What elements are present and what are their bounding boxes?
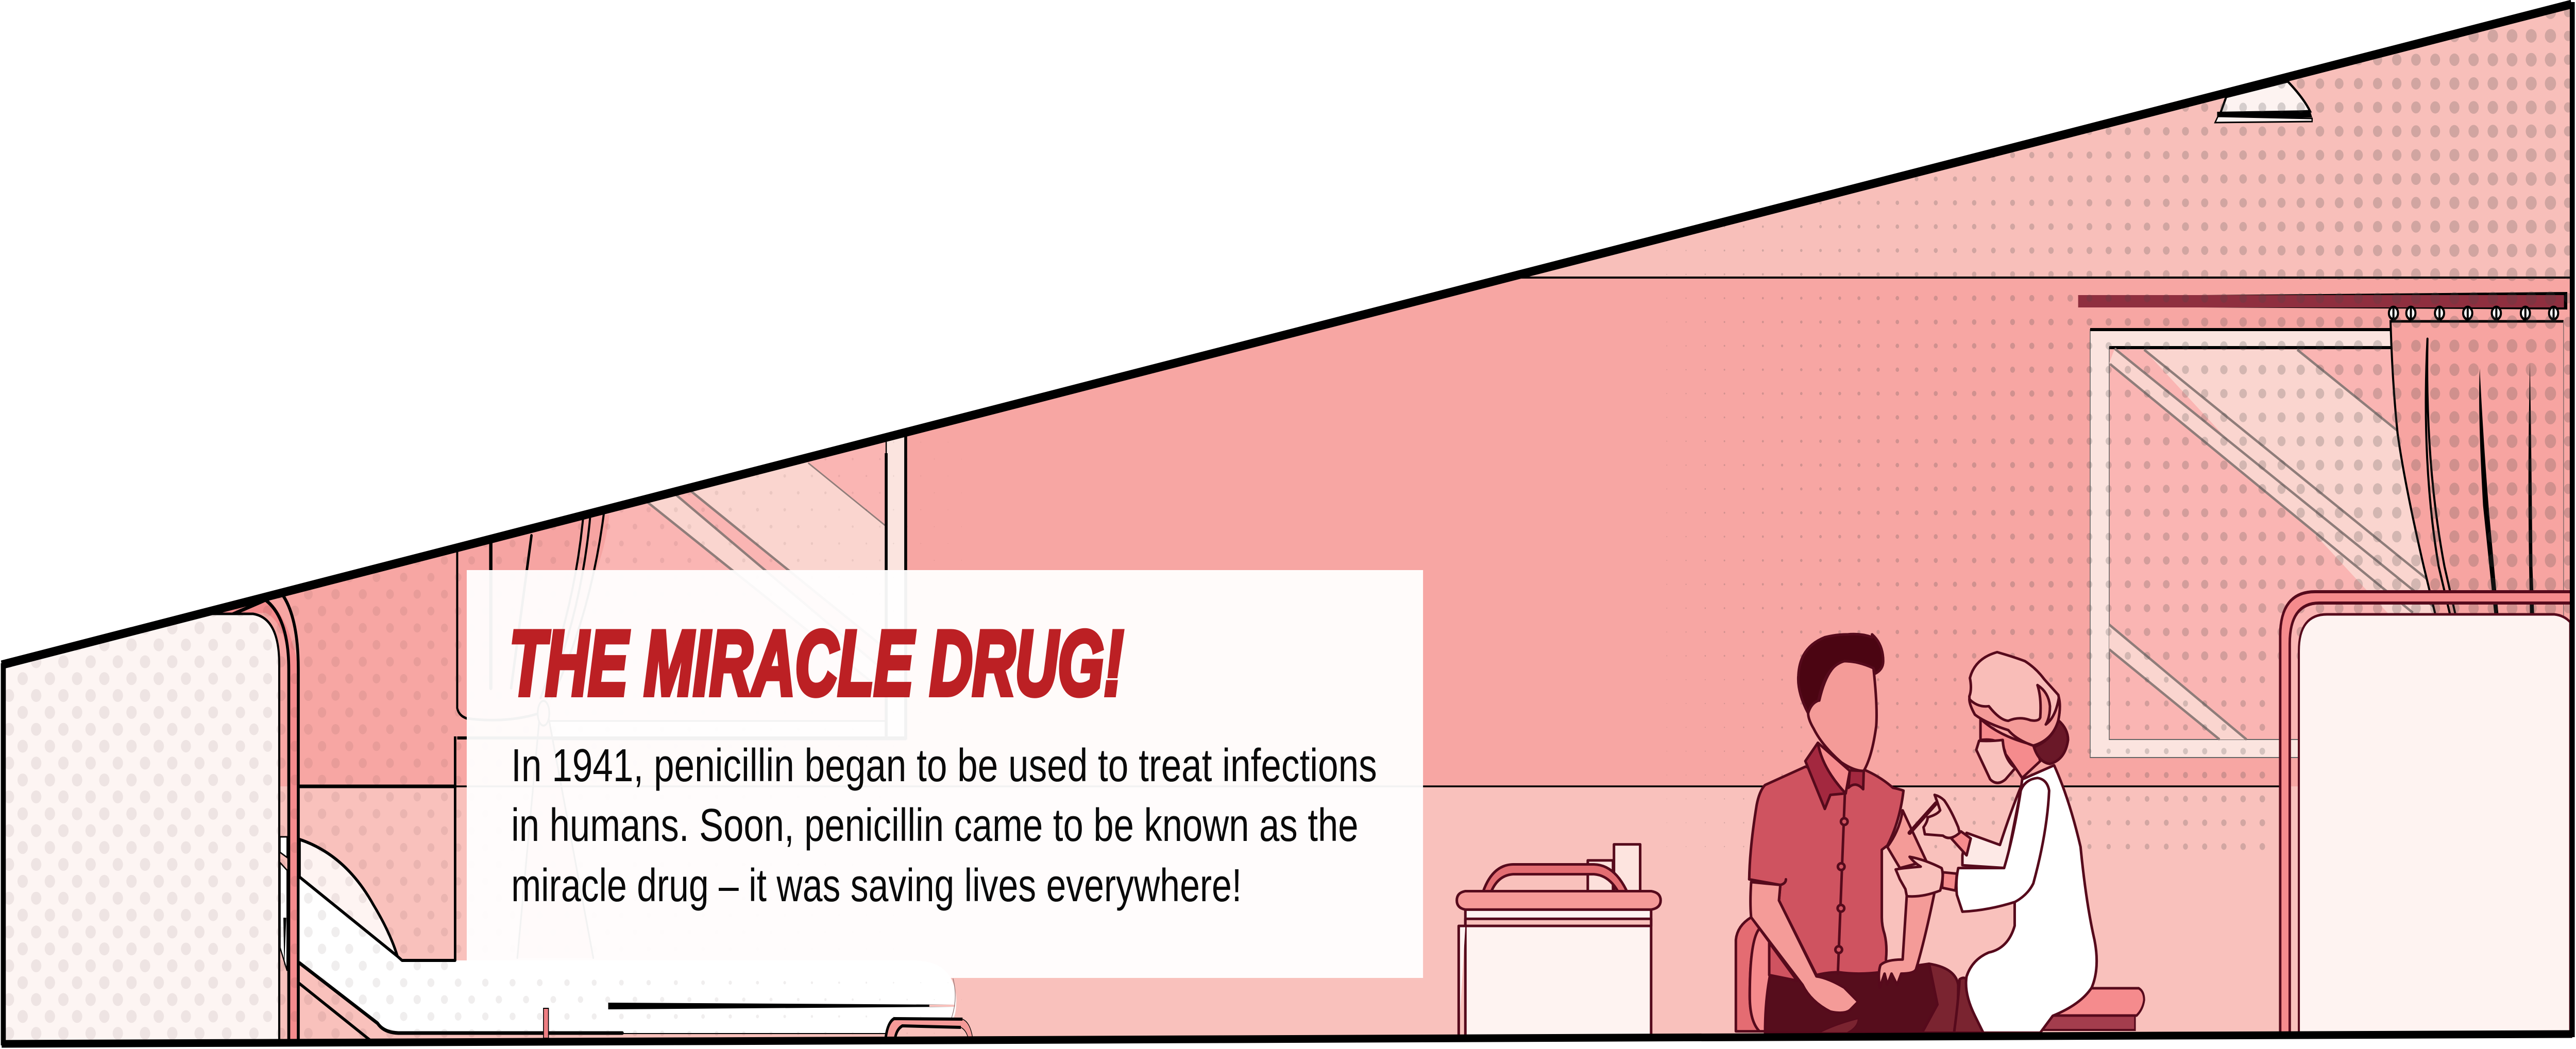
ceiling <box>1507 0 2572 278</box>
patient's hair <box>1798 634 1883 713</box>
hospital bed <box>280 837 956 1043</box>
curtain rod <box>2078 292 2567 309</box>
halftone dots: left <box>6 425 962 1040</box>
cart body <box>1465 909 1651 1039</box>
cart top <box>1457 891 1660 909</box>
small box <box>1588 861 1613 891</box>
nurse's front sleeve <box>1956 778 2049 912</box>
wall base line right <box>456 785 2282 787</box>
right curtain <box>2391 321 2564 618</box>
cart back edge <box>1459 926 1465 1037</box>
patient's upper arm <box>1887 811 1926 868</box>
panel background <box>467 570 1423 978</box>
nurse's hair bun <box>2034 720 2068 764</box>
nurse's wrist <box>1951 832 1971 855</box>
patient's left arm <box>1751 882 1858 1013</box>
patient's forearm and hand <box>1879 892 1935 988</box>
nurse's coat <box>1966 765 2097 1033</box>
placket and buttons <box>1835 795 1848 974</box>
left screen <box>6 613 280 1040</box>
nurse stool <box>2040 988 2144 1030</box>
wall <box>256 279 2570 786</box>
medicine cart <box>1457 845 1660 1039</box>
lower wall <box>280 786 2298 1039</box>
text panel <box>467 570 1423 978</box>
heading: THE MIRACLE DRUG! <box>510 612 1124 715</box>
nurse's gloved hand on arm <box>1896 857 1943 897</box>
nurse's neck <box>1980 719 2040 778</box>
right screen frame <box>2280 592 2571 1038</box>
patient's face <box>1808 661 1876 771</box>
nurse's gloved hand with syringe <box>1923 795 1960 838</box>
bed side cart <box>886 1019 973 1037</box>
left window <box>550 437 907 741</box>
left curtain <box>456 514 904 959</box>
wall base line <box>299 785 456 788</box>
right window <box>2090 330 2468 758</box>
right screen <box>2299 614 2570 1038</box>
left screen frame <box>223 596 300 1039</box>
patient's collar <box>1805 743 1863 809</box>
wall corner line <box>453 736 456 961</box>
ceiling line <box>1507 277 2572 279</box>
halftone dots: right <box>1667 12 2568 847</box>
patient's shirt <box>1749 767 1904 981</box>
nurse's mask <box>1976 740 2015 783</box>
patient and nurse <box>1736 634 2097 1033</box>
nurse's cap <box>1970 652 2060 746</box>
bottle <box>1614 845 1640 892</box>
body text: miracle drug – it was saving lives everywhere! <box>511 860 1242 912</box>
body text: In 1941, penicillin began to be used to treat infections <box>511 740 1377 792</box>
cart stripe <box>1465 919 1651 926</box>
nurse's back sleeve <box>1962 784 2022 868</box>
syringe <box>1910 803 1936 833</box>
curtain hooks <box>2389 307 2558 321</box>
patient's trousers <box>1765 964 1983 1033</box>
patient's chair <box>1736 917 1770 1031</box>
nurse's second wrist <box>1942 872 1957 890</box>
patient's neck <box>1818 743 1850 794</box>
body text <box>511 740 1377 912</box>
ceiling lamp <box>2215 81 2312 123</box>
cart handle <box>1479 864 1634 909</box>
body text: in humans. Soon, penicillin came to be known as the <box>511 800 1358 851</box>
